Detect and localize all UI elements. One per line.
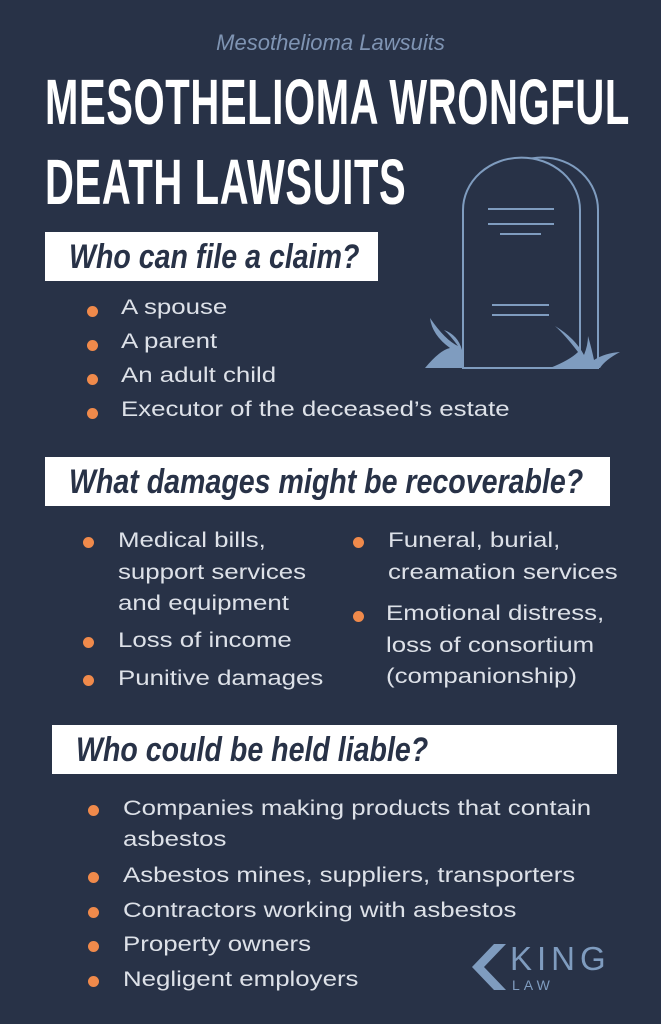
list: damages left (83, 529, 323, 690)
title: DEATH LAWSUITS (45, 146, 406, 218)
list: liable parties: asbestos (123, 828, 226, 851)
list: damages right (353, 529, 618, 688)
list: claimants: An adult child (121, 364, 276, 387)
list: liable parties: Negligent employers (123, 968, 358, 991)
list: damages right: Funeral, burial, (388, 529, 560, 552)
heading: damages: What damages might be recoverable? (69, 463, 583, 501)
list: damages right: (companionship) (386, 665, 577, 688)
list: liable parties: Contractors working with asbestos (123, 899, 516, 922)
list: claimants: A spouse (121, 296, 227, 319)
list: claimants (87, 296, 510, 421)
title: MESOTHELIOMA WRONGFUL (45, 66, 630, 138)
list: claimants: Executor of the deceased’s estate (121, 398, 510, 421)
logo: King Law: LAW (512, 977, 554, 993)
list: damages right: creamation services (388, 560, 618, 584)
logo: King Law (472, 940, 611, 993)
heading: liable (52, 725, 617, 774)
logo: King Law: KING (510, 940, 611, 977)
list: liable parties (88, 797, 591, 991)
list: damages left: Punitive damages (118, 667, 323, 690)
list: claimants: A parent (121, 330, 217, 353)
list: liable parties: Property owners (123, 933, 311, 956)
title (45, 66, 630, 218)
list: damages left: Medical bills, (118, 529, 266, 552)
list: damages left: Loss of income (118, 629, 292, 652)
list: damages right: loss of consortium (386, 634, 594, 656)
heading: who can file (45, 232, 378, 281)
list: liable parties: Companies making products that contain (123, 797, 591, 820)
icon: tombstone (425, 156, 620, 369)
list: damages left: support services (118, 560, 306, 584)
list: damages right: Emotional distress, (386, 602, 604, 625)
heading: liable: Who could be held liable? (76, 731, 428, 769)
subtitle: Mesothelioma Lawsuits (216, 30, 445, 55)
list: liable parties: Asbestos mines, suppliers, transporters (123, 864, 575, 887)
heading: who can file: Who can file a claim? (69, 238, 359, 276)
list: damages left: and equipment (118, 592, 289, 615)
